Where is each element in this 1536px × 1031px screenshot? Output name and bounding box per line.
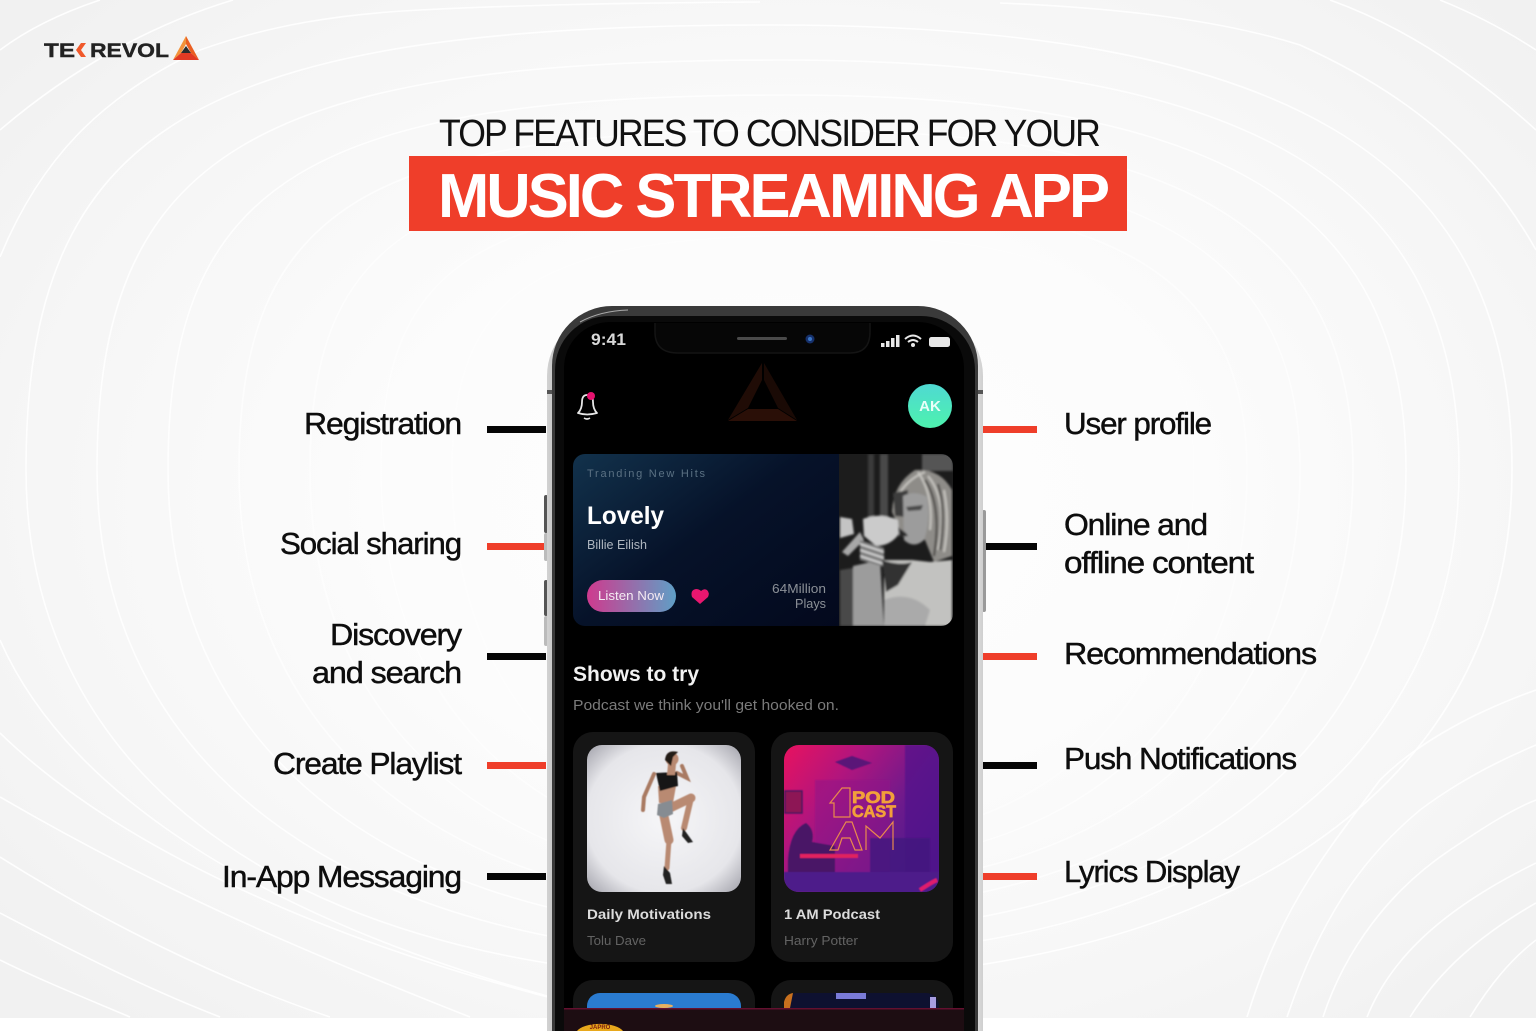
cover lettering: pod cast: POD bbox=[852, 788, 895, 807]
left feature: Registration: Registration bbox=[304, 406, 461, 441]
right feature: Lyrics Display bbox=[983, 854, 1241, 889]
phone frame bbox=[547, 306, 983, 1031]
image: podcast cover bbox=[784, 745, 939, 892]
card title: Daily Motivations bbox=[587, 906, 711, 922]
notch bbox=[655, 323, 870, 353]
card author: Harry Potter bbox=[784, 933, 859, 948]
logo wordmark: TE bbox=[44, 41, 75, 62]
left feature: Discovery and search: Discovery bbox=[330, 617, 463, 652]
left feature: Social sharing bbox=[280, 526, 544, 561]
phone mockup bbox=[544, 306, 986, 1031]
play count: 64Million bbox=[772, 581, 826, 596]
left feature: Discovery and search: and search bbox=[312, 655, 461, 690]
card: trending hero bbox=[573, 454, 953, 626]
right feature: Online and offline content: Online and bbox=[1064, 507, 1207, 542]
icon: heart bbox=[692, 589, 709, 604]
right feature: User profile bbox=[983, 406, 1211, 441]
logo wordmark bbox=[44, 41, 169, 62]
card: daily motivations bbox=[573, 732, 755, 962]
logo wordmark: REVOL bbox=[90, 41, 169, 62]
left feature: Social sharing: Social sharing bbox=[280, 526, 461, 561]
avatar bbox=[908, 384, 952, 428]
title line 2: MUSIC STREAMING APP bbox=[438, 162, 1109, 231]
title line 1: TOP FEATURES TO CONSIDER FOR YOUR bbox=[439, 113, 1100, 155]
left feature: Create Playlist bbox=[273, 746, 546, 781]
right feature: Recommendations: Recommendations bbox=[1064, 636, 1317, 671]
right feature: Online and offline content bbox=[986, 507, 1255, 580]
status time: 9:41 bbox=[591, 330, 626, 349]
left feature: In-App Messaging: In-App Messaging bbox=[222, 859, 461, 894]
section heading: shows to try: Shows to try bbox=[573, 663, 699, 686]
right feature: Lyrics Display: Lyrics Display bbox=[1064, 854, 1241, 889]
logo triangle mark bbox=[173, 36, 199, 60]
left feature: Create Playlist: Create Playlist bbox=[273, 746, 463, 781]
hero song title: Lovely bbox=[587, 502, 664, 530]
left feature: Registration bbox=[304, 406, 546, 441]
avatar: AK bbox=[919, 398, 941, 415]
title bbox=[409, 113, 1127, 231]
mini player bar: JAPRO bbox=[590, 1025, 611, 1031]
logo: Tekrevol bbox=[44, 36, 199, 62]
listen now button: Listen Now bbox=[598, 588, 665, 603]
cover lettering: pod cast bbox=[852, 791, 896, 818]
section subheading: Podcast we think you'll get hooked on. bbox=[573, 697, 839, 714]
side buttons bbox=[544, 495, 986, 646]
cover lettering: pod cast: CAST bbox=[852, 802, 897, 821]
watermark triangle bbox=[728, 363, 797, 421]
left feature: Discovery and search bbox=[312, 617, 546, 690]
mini player bar bbox=[564, 1008, 964, 1031]
right feature: Online and offline content: offline content bbox=[1064, 545, 1255, 580]
play count bbox=[772, 581, 826, 611]
card author: Tolu Dave bbox=[587, 933, 646, 948]
card title: 1 AM Podcast bbox=[784, 906, 880, 922]
phone screen bbox=[564, 322, 964, 1031]
play count: Plays bbox=[795, 596, 826, 611]
listen now button bbox=[587, 580, 676, 612]
icon: notification bell bbox=[578, 392, 597, 419]
right feature: Push Notifications: Push Notifications bbox=[1064, 741, 1297, 776]
speaker and camera bbox=[737, 334, 814, 344]
cover lettering: 1 AM bbox=[830, 788, 893, 850]
image: athlete bbox=[587, 745, 741, 892]
hero artist: Billie Eilish bbox=[587, 537, 647, 552]
hero eyebrow: Tranding New Hits bbox=[587, 468, 706, 480]
status icons bbox=[881, 335, 950, 347]
partial cards row bbox=[573, 980, 953, 1031]
card: 1 AM podcast bbox=[771, 732, 953, 962]
right feature: User profile: User profile bbox=[1064, 406, 1211, 441]
title highlight banner bbox=[409, 156, 1127, 231]
hero photo: singer bbox=[839, 454, 953, 626]
